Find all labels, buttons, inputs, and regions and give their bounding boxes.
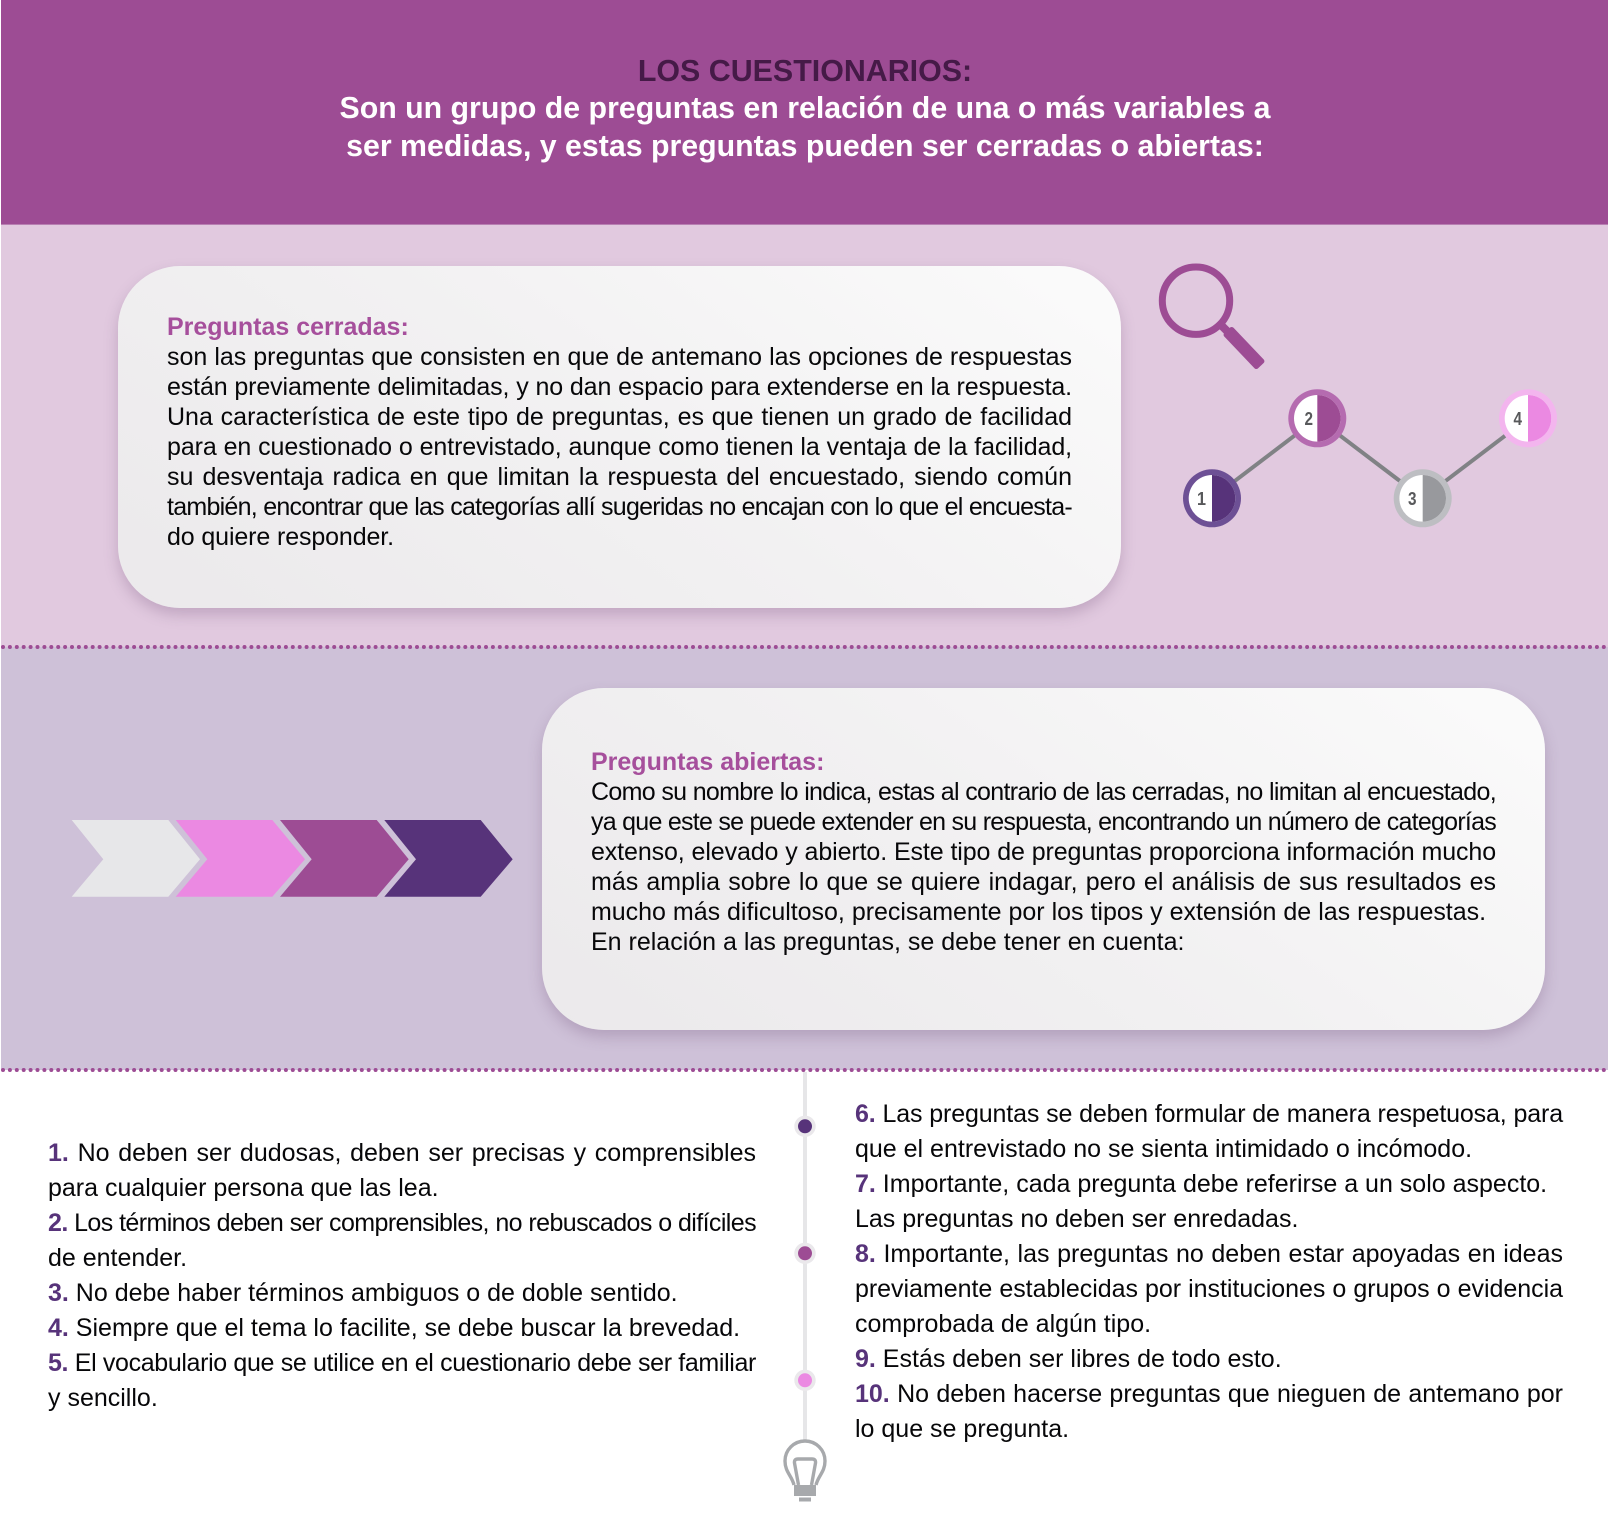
text block: preguntas cerradas: también, encontrar que las categorías allí sugeridas no encajan con lo que el encuesta- — [167, 493, 1072, 521]
step 4: 4 — [1514, 408, 1523, 429]
list: left column items 1-5: 2. Los términos deben ser comprensibles, no rebuscados o difíciles — [48, 1209, 756, 1237]
timeline with bulb — [783, 1072, 827, 1502]
list: left column items 1-5 — [48, 1139, 756, 1412]
text block: preguntas cerradas: Una característica de este tipo de preguntas, es que tienen un grado de facilidad — [167, 403, 1072, 431]
panel: preguntas abiertas — [542, 688, 1545, 1030]
list: right column items 6-10: 9. Estás deben ser libres de todo esto. — [855, 1345, 1282, 1373]
list: left column items 1-5: 1. No deben ser dudosas, deben ser precisas y comprensibles — [48, 1139, 756, 1167]
panel: preguntas cerradas — [118, 266, 1121, 608]
band: closed questions background — [1, 225, 1608, 647]
list: left column items 1-5: de entender. — [48, 1244, 187, 1272]
list: right column items 6-10: lo que se pregunta. — [855, 1415, 1069, 1443]
text block: preguntas abiertas: Como su nombre lo indica, estas al contrario de las cerradas, no limitan al encuestado, — [591, 778, 1496, 806]
title — [339, 54, 1271, 163]
text block: preguntas abiertas: ya que este se puede extender en su respuesta, encontrando un número de categorías — [591, 808, 1496, 836]
connector lines — [1212, 418, 1317, 498]
text block: preguntas cerradas: Preguntas cerradas: — [167, 312, 409, 340]
step 3: 3 — [1408, 488, 1416, 509]
timeline dot magenta — [794, 1243, 816, 1264]
text block: preguntas abiertas: En relación a las preguntas, se debe tener en cuenta: — [591, 928, 1184, 956]
list: right column items 6-10 — [855, 1100, 1564, 1443]
icon: magnifying glass — [1158, 264, 1264, 369]
chevron light gray — [72, 820, 200, 897]
title: Son un grupo de preguntas en relación de una o más variables a — [339, 92, 1270, 125]
icon: light bulb — [785, 1441, 825, 1502]
step 3 — [1394, 469, 1452, 527]
text block: preguntas abiertas — [591, 748, 1496, 956]
text block: preguntas abiertas: más amplia sobre lo que se quiere indagar, pero el análisis de sus resultados es — [591, 868, 1496, 896]
list: right column items 6-10: 10. No deben hacerse preguntas que nieguen de antemano por — [855, 1380, 1563, 1408]
text block: preguntas cerradas: son las preguntas que consisten en que de antemano las opciones de respuestas — [167, 343, 1072, 371]
step 1: 1 — [1197, 488, 1206, 509]
list: left column items 1-5: 3. No debe haber términos ambiguos o de doble sentido. — [48, 1279, 678, 1307]
arrow: four chevrons — [72, 820, 513, 897]
list: right column items 6-10: comprobada de algún tipo. — [855, 1310, 1151, 1338]
list: right column items 6-10: que el entrevistado no se sienta intimidado o incómodo. — [855, 1135, 1472, 1163]
list: left column items 1-5: 5. El vocabulario que se utilice en el cuestionario debe ser familiar — [48, 1349, 756, 1377]
chevron magenta — [280, 820, 409, 897]
list: right column items 6-10: Las preguntas no deben ser enredadas. — [855, 1205, 1298, 1233]
chevron purple — [384, 820, 513, 897]
chevron pink — [176, 820, 305, 897]
list: right column items 6-10: 7. Importante, cada pregunta debe referirse a un solo aspecto. — [855, 1170, 1547, 1198]
list: left column items 1-5: para cualquier persona que las lea. — [48, 1174, 439, 1202]
band: open questions background — [1, 647, 1608, 1070]
step 4 — [1499, 389, 1557, 447]
list: left column items 1-5: 4. Siempre que el tema lo facilite, se debe buscar la brevedad. — [48, 1314, 740, 1342]
text block: preguntas cerradas: para en cuestionado o entrevistado, aunque como tienen la ventaja de la facilidad, — [167, 433, 1072, 461]
text block: preguntas cerradas: do quiere responder. — [167, 523, 394, 551]
title: ser medidas, y estas preguntas pueden ser cerradas o abiertas: — [346, 130, 1264, 163]
text block: preguntas abiertas: mucho más dificultoso, precisamente por los tipos y extensión de las respuestas. — [591, 898, 1486, 926]
text block: preguntas cerradas: su desventaja radica en que limitan la respuesta del encuestado, siendo común — [167, 463, 1072, 491]
list: left column items 1-5: y sencillo. — [48, 1384, 158, 1412]
connector line 3 to 4 — [1423, 418, 1528, 498]
list: right column items 6-10: 8. Importante, las preguntas no deben estar apoyadas en ideas — [855, 1240, 1563, 1268]
step 1 — [1183, 469, 1241, 527]
step 2 — [1288, 389, 1346, 447]
text block: preguntas abiertas: extenso, elevado y abierto. Este tipo de preguntas proporciona información mucho — [591, 838, 1496, 866]
timeline dot purple — [794, 1116, 816, 1137]
text block: preguntas abiertas: Preguntas abiertas: — [591, 748, 824, 776]
header band — [1, 0, 1608, 225]
step 2: 2 — [1304, 408, 1313, 429]
text block: preguntas cerradas: están previamente delimitadas, y no dan espacio para extenderse en la respuesta. — [167, 373, 1072, 401]
chart: numbered step path — [1183, 389, 1557, 528]
title: LOS CUESTIONARIOS: — [638, 54, 972, 88]
connector line 2 to 3 — [1317, 418, 1423, 498]
list: right column items 6-10: previamente establecidas por instituciones o grupos o evidencia — [855, 1275, 1563, 1303]
text block: preguntas cerradas — [167, 312, 1072, 551]
list: right column items 6-10: 6. Las preguntas se deben formular de manera respetuosa, para — [855, 1100, 1563, 1128]
timeline dot pink — [794, 1370, 816, 1391]
